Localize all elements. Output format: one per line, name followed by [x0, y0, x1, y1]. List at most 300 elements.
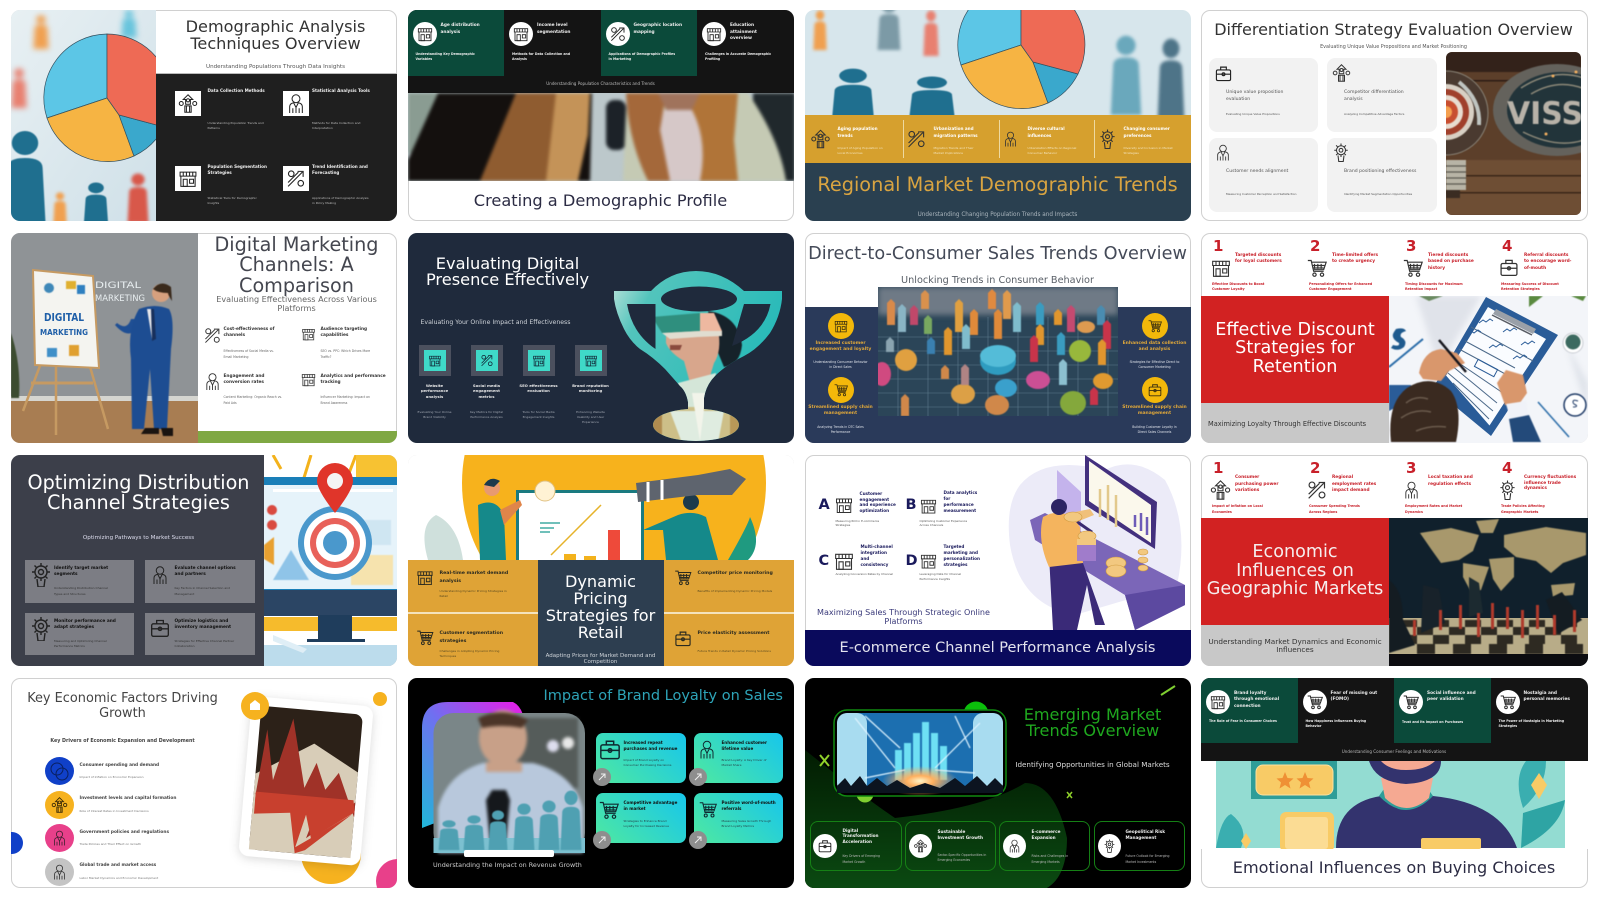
step 4: influence trade — [1524, 481, 1561, 486]
slide: Regional Market Demographic Trends — [804, 10, 1191, 220]
step 3: Tiered discounts — [1428, 252, 1468, 258]
icon: brand tile — [574, 344, 606, 376]
item: statistical tools: Methods for Data Collection and — [312, 121, 360, 125]
feature: supply chain right: Streamlined supply chain — [1122, 404, 1187, 410]
item A: A — [818, 497, 830, 513]
icon: store — [1206, 690, 1230, 714]
factor: consumer spending — [44, 756, 164, 786]
item: cost: Email Marketing — [224, 355, 248, 359]
icon: seo tile — [522, 344, 554, 376]
card: e-commerce — [998, 820, 1090, 870]
item: trend identification: Applications of Demographic Analysis — [312, 196, 369, 200]
item: trend identification: in Policy Making — [312, 201, 336, 205]
card: identify: Understanding Distribution Channel — [54, 586, 108, 590]
item: social influence — [1399, 690, 1489, 732]
card: identify: segments — [54, 572, 78, 577]
icon: money — [1332, 64, 1350, 82]
item: trend identification — [283, 164, 369, 205]
item D: personalization — [944, 556, 980, 561]
item: preferences: Diversity and Inclusion in Market — [1124, 146, 1173, 150]
feature: engagement: in Direct Sales — [829, 365, 852, 369]
item: trend identification: Forecasting — [312, 170, 339, 175]
item: audience: Traffic? — [320, 355, 331, 359]
card: lifetime value — [694, 732, 782, 782]
card: repeat purchases: Consumer Purchasing Decisions — [624, 763, 671, 767]
item: preferences: Strategies — [1124, 151, 1139, 155]
step 1: purchasing power — [1235, 482, 1278, 486]
item: segmentation: Statistical Tools for Demographic — [208, 196, 257, 200]
card: e-commerce: E-commerce — [1032, 828, 1060, 834]
slide: Effective Discount Strategies for Retention — [1201, 232, 1588, 443]
image: man drawing on easel: DIGITAL — [44, 312, 84, 324]
title: Retention — [1253, 356, 1337, 376]
icon: money — [1210, 480, 1231, 500]
icon: store — [920, 551, 936, 571]
card: digital transformation — [810, 820, 902, 870]
step 1: Impact of Inflation on Local — [1212, 504, 1263, 508]
item: social influence: peer validation — [1427, 697, 1464, 702]
card: monitor: Monitor performance and — [54, 619, 116, 624]
icon: person — [44, 824, 74, 852]
card: optimize: Optimize logistics and — [174, 619, 228, 624]
panel: dark header strip — [408, 10, 794, 93]
arrow badge 4 — [688, 830, 706, 848]
item: analytics: Analytics and performance — [320, 374, 386, 378]
metric: brand: Brand reputation — [572, 382, 609, 388]
title — [186, 17, 365, 53]
card: geopolitical risk: Geopolitical Risk — [1126, 828, 1165, 834]
item: segmentation: strategies — [440, 639, 466, 644]
step 1: 1 — [1213, 236, 1223, 254]
card: competitive advantage: Strategies to Enhance Brand — [624, 818, 667, 822]
icon: money — [174, 91, 200, 116]
step 3 — [1402, 459, 1492, 516]
item: preferences: Changing consumer — [1124, 126, 1170, 131]
item: cost: channels — [224, 333, 245, 338]
icon: gear — [1098, 834, 1121, 858]
icon: money — [44, 790, 74, 818]
panel: red title — [1201, 296, 1389, 402]
step 1: for loyal customers — [1235, 259, 1282, 264]
item: realtime — [414, 569, 534, 607]
item: nostalgia: personal memories — [1524, 697, 1570, 702]
title: Economic — [1252, 542, 1338, 562]
subtitle: Competition — [584, 659, 617, 665]
icon: store — [920, 496, 936, 516]
step 1 — [1209, 236, 1299, 294]
metric: website — [418, 345, 452, 419]
item B: performance — [944, 502, 974, 507]
item: data collection — [175, 88, 265, 130]
feature: supply chain left — [806, 376, 874, 436]
item: aging: Local Economies — [838, 151, 863, 155]
card: customer: Measuring Customer Perception and Satisfaction — [1226, 192, 1296, 196]
item: geographic: mapping — [634, 30, 655, 35]
icon: cart — [1402, 258, 1424, 278]
title: Strategies for — [546, 606, 655, 625]
title: Growth — [99, 706, 146, 720]
image: woman in VR headset inside trophy — [614, 271, 782, 441]
step 2: Customer Engagement — [1309, 287, 1351, 291]
icon: store tile — [418, 344, 450, 376]
card: word of mouth: Brand Loyalty Metrics — [722, 824, 754, 828]
step 3: Retention Impact — [1405, 287, 1437, 291]
card: competitive advantage: in market — [624, 806, 646, 811]
item: realtime: Retail — [440, 594, 448, 598]
icon: map — [606, 22, 630, 46]
metric: website: Evaluating Your Online — [418, 410, 451, 414]
item: statistical tools — [283, 88, 370, 130]
card: e-commerce: Emerging Markets — [1032, 860, 1060, 864]
factor: consumer spending: Impact of Inflation on Economic Expansion — [80, 775, 144, 779]
metric: brand: Enhancing Website — [576, 410, 605, 414]
panel: navy footer — [804, 163, 1192, 221]
card: sustainable investment: Sustainable — [938, 828, 965, 834]
step 4: Trade Policies Affecting — [1501, 504, 1545, 508]
card: sustainable investment: Emerging Economies — [938, 858, 970, 862]
card: word of mouth: Positive word-of-mouth — [722, 800, 776, 804]
item: education — [702, 22, 771, 61]
feature: data collection — [1120, 312, 1188, 372]
title: Geographic Markets — [1207, 579, 1383, 599]
card: lifetime value: Brand Loyalty: A Key Driver of — [722, 758, 766, 762]
item: age distribution: Variables — [416, 57, 432, 61]
footer text: Maximizing Loyalty Through Effective Discounts — [1208, 420, 1366, 428]
icon: cart badge — [828, 376, 854, 402]
step 3: 3 — [1406, 236, 1416, 254]
subtitle: Identifying Opportunities in Global Markets — [1015, 760, 1170, 768]
icon: money — [908, 834, 932, 858]
metric: seo: evaluation — [527, 388, 550, 393]
item: segmentation: Techniques — [440, 654, 456, 658]
title: E-commerce Channel Performance Analysis — [840, 640, 1155, 656]
item: cultural: Diverse cultural — [1028, 126, 1065, 131]
item D: D — [906, 553, 918, 569]
card: digital transformation: Key Drivers of Emerging — [842, 854, 880, 858]
icon: store — [1209, 258, 1233, 278]
icon: cart badge — [1142, 312, 1168, 338]
card: repeat purchases: purchases and revenue — [624, 746, 677, 751]
title: Channels: A — [239, 253, 354, 276]
panel: green column 1 — [408, 10, 504, 76]
item: brand loyalty — [1206, 690, 1296, 732]
title: Regional Market Demographic Trends — [817, 173, 1178, 196]
slide: E-commerce Channel Performance Analysis: Targeted — [944, 544, 964, 549]
icon: education — [702, 22, 726, 46]
step 3: Employment Rates and Market — [1405, 504, 1462, 508]
item: urbanization: Market Implications — [934, 151, 963, 155]
icon: bag — [672, 630, 694, 647]
step 4: Geographic Markets — [1501, 510, 1538, 514]
icon: store — [414, 569, 436, 586]
step 1: Economies — [1212, 510, 1232, 514]
image: man drawing on easel: DIGITAL — [94, 280, 140, 290]
feature: engagement: engagement and loyalty — [810, 347, 871, 352]
item: brand loyalty: The Role of Fear in Consumer Choices — [1209, 719, 1277, 723]
subtitle: Evaluating Your Online Impact and Effectiveness — [420, 319, 570, 326]
item C — [818, 547, 902, 581]
slide: Impact of Brand Loyalty on Sales — [408, 678, 794, 888]
divider left — [408, 612, 538, 614]
card: lifetime value: Market Share — [722, 763, 741, 767]
item: geographic: Applications of Demographic Profiles — [608, 52, 675, 56]
item: brand loyalty: connection — [1234, 704, 1261, 709]
card: digital transformation: Digital — [842, 828, 858, 832]
panel: navy band — [804, 306, 1192, 444]
card: monitor: Performance Metrics — [54, 644, 85, 648]
slide: Creating a Demographic Profile — [408, 10, 794, 220]
step 2: Personalizing Offers for Enhanced — [1309, 282, 1372, 286]
card: geopolitical risk: Market Investments — [1126, 860, 1156, 864]
factor: global trade: Global trade and market access — [80, 862, 156, 868]
item A: optimization — [860, 508, 889, 513]
card: word of mouth — [694, 792, 782, 842]
panel: green column 3 — [600, 10, 697, 76]
item: trend identification: Trend Identification and — [312, 164, 368, 169]
icon: income — [509, 22, 533, 46]
item C: consistency — [860, 562, 888, 567]
step 1: Effective Discounts to Boost — [1212, 282, 1264, 286]
card: unique value: Unique value proposition — [1226, 90, 1283, 94]
card: optimize: Strategies for Effective Channel Partner — [174, 638, 234, 642]
icon: store — [832, 496, 854, 514]
icon: store — [832, 551, 854, 571]
item: realtime: analysis — [440, 579, 461, 584]
step 4: of-mouth — [1524, 266, 1546, 270]
item: social influence: Trust and Its Impact on Purchases — [1402, 720, 1463, 724]
card: competitive advantage — [596, 792, 686, 842]
panel: gold right — [664, 560, 794, 666]
metric: social: Social media — [473, 382, 500, 388]
item: preferences: preferences — [1124, 132, 1151, 138]
metric: brand — [566, 344, 614, 424]
step 3: based on purchase — [1428, 259, 1474, 264]
icon: briefcase — [813, 834, 837, 858]
step 2: Regional — [1332, 475, 1353, 480]
metric: website: performance — [421, 388, 448, 393]
subtitle — [817, 608, 990, 627]
icon: person — [1403, 480, 1420, 500]
item A: Measuring ROI in E-commerce — [836, 518, 879, 522]
slide: Key Economic Factors Driving Growth — [10, 678, 397, 888]
card: repeat purchases: Increased repeat — [624, 740, 663, 744]
arrow badge 3 — [592, 830, 610, 848]
item: engagement: conversion rates — [224, 380, 264, 385]
card: evaluate: Evaluate channel options — [174, 566, 236, 571]
card: identify — [24, 560, 134, 603]
step 2: impact demand — [1332, 488, 1370, 493]
item: analytics: Influencer Marketing: Impact on — [320, 394, 370, 398]
item: audience: SEO vs. PPC: Which Drives More — [320, 349, 370, 353]
item: cultural: Urbanization Effects on Regional — [1028, 146, 1076, 150]
item D: strategies — [944, 562, 968, 567]
card: competitor — [1327, 58, 1437, 132]
item C: integration — [860, 550, 887, 555]
feature: data collection: Consumer Marketing — [1138, 365, 1171, 369]
item: geographic — [606, 22, 682, 61]
step 1: variations — [1235, 488, 1259, 493]
icon: cart — [672, 569, 694, 586]
item: cultural: influences — [1028, 132, 1051, 138]
icon: age — [412, 22, 436, 46]
metric: brand: Experience — [582, 420, 599, 424]
item: education: Education — [730, 23, 754, 28]
title: Pricing — [573, 589, 628, 608]
image: world map and chess board — [1389, 518, 1588, 666]
card: geopolitical risk — [1094, 820, 1184, 870]
title: Evaluating Digital — [436, 254, 579, 272]
item: urbanization: migration patterns — [934, 132, 978, 138]
feature: engagement: Understanding Consumer Behavior — [813, 360, 868, 364]
image: man drawing on easel: MARKETING — [94, 294, 144, 304]
image: tilted photo with red chart and decorative circles — [10, 678, 398, 888]
feature: supply chain right: Building Customer Loyalty in — [1132, 424, 1177, 428]
item: age distribution: analysis — [440, 30, 460, 35]
factor: investment — [44, 790, 164, 820]
card: repeat purchases: Impact of Brand Loyalty on — [624, 758, 664, 762]
item: cultural: Consumer Behavior — [1028, 151, 1057, 155]
step 4: 4 — [1502, 459, 1512, 477]
panel: gray footer — [1201, 625, 1389, 666]
factor: investment: Role of Interest Rates in Investment Decisions — [80, 809, 149, 813]
panel: navy footer — [804, 630, 1192, 666]
card: evaluate: and partners — [174, 572, 206, 577]
item: elasticity: Price elasticity assessment — [698, 631, 770, 636]
item: income: Income level — [537, 23, 568, 28]
metric: social: engagement — [473, 388, 500, 393]
item: cultural — [1005, 126, 1076, 155]
title: Retail — [578, 623, 623, 642]
card: competitive advantage: Loyalty for Increased Revenue — [624, 824, 669, 828]
factor: government — [44, 824, 164, 852]
item: FOMO: Fear of missing out — [1330, 690, 1377, 696]
icon: person — [1005, 132, 1016, 146]
icon: network — [1498, 258, 1520, 276]
card: e-commerce: Expansion — [1032, 835, 1056, 840]
slide: Optimizing Distribution Channel Strategies — [10, 455, 397, 666]
feature: data collection: Enhanced data collection — [1123, 340, 1186, 346]
panel: navy center — [538, 560, 664, 666]
icon: percent arrow — [1306, 480, 1328, 500]
accent bar — [198, 430, 398, 444]
item D: marketing and — [944, 550, 978, 555]
item: competitor — [672, 569, 792, 599]
item: segmentation — [175, 164, 267, 205]
slide: Direct-to-Consumer Sales Trends Overview — [804, 232, 1191, 443]
image: man drawing on easel — [11, 233, 198, 443]
title — [546, 573, 655, 641]
feature: data collection: Strategies for Effective Direct to — [1130, 360, 1179, 364]
card: optimize: inventory management — [174, 625, 231, 630]
icon: cart — [1302, 690, 1326, 714]
item: segmentation — [414, 629, 534, 664]
subtitle — [216, 294, 377, 313]
item: nostalgia: Strategies — [1498, 724, 1517, 728]
card: monitor: adapt strategies — [54, 625, 94, 630]
icon: money — [811, 130, 830, 148]
image: light bulb and vision target on wood — [1446, 52, 1581, 215]
factor: global trade — [44, 858, 164, 886]
caption: Understanding Population Characteristics and Trends — [546, 81, 655, 86]
icon: person — [206, 373, 219, 390]
step 4 — [1498, 459, 1586, 516]
item: aging: Aging population — [838, 126, 878, 131]
factor: government: Government policies and regulations — [80, 830, 169, 834]
title: Emotional Influences on Buying Choices — [1233, 858, 1555, 876]
card: identify: Identify target market — [54, 566, 108, 571]
subtitle: Understanding Changing Population Trends and Impacts — [918, 212, 1077, 218]
item B: Optimizing Customer Experience — [920, 518, 967, 522]
item: audience: capabilities — [320, 333, 348, 338]
item: FOMO: How Happiness Influences Buying — [1306, 719, 1366, 723]
step 3: Timing Discounts for Maximum — [1405, 282, 1463, 286]
item: education: overview — [730, 36, 752, 41]
metric: brand: Usability and User — [577, 415, 604, 419]
title: Effective Discount — [1215, 320, 1375, 340]
card: word of mouth: Measuring Sales Growth Through — [722, 818, 771, 822]
icon: bag badge — [1142, 376, 1168, 402]
title: Creating a Demographic Profile — [474, 191, 727, 210]
item: engagement: Engagement and — [224, 374, 264, 378]
metric: website: Brand Visibility — [423, 415, 446, 419]
item: segmentation: Insights — [208, 201, 219, 205]
item: statistical tools: Statistical Analysis Tools — [312, 88, 370, 93]
title: Presence Effectively — [426, 270, 589, 289]
title — [426, 254, 589, 289]
item: segmentation: Customer segmentation — [440, 631, 503, 636]
feature: supply chain right: Direct Sales Channels — [1138, 430, 1171, 434]
icon: cost — [205, 328, 220, 343]
item: realtime: Understanding Dynamic Pricing Strategies in — [440, 589, 507, 593]
panel: gold band — [804, 115, 1192, 163]
card: competitor: Analyzing Competitive Advantage Factors — [1344, 112, 1404, 116]
step 4: Referral discounts — [1524, 252, 1568, 258]
item: competitor: Competitor price monitoring — [698, 571, 773, 576]
item: analytics — [302, 374, 386, 404]
item C: C — [818, 553, 829, 569]
icon: briefcase — [1216, 66, 1232, 82]
metric: social — [470, 345, 503, 419]
arrow badge 1 — [592, 768, 610, 786]
footer text: Influences — [1276, 645, 1314, 654]
item A — [818, 491, 902, 533]
title: Channel Strategies — [47, 491, 230, 514]
icon: coins — [44, 756, 74, 784]
image: two women with long hair — [408, 93, 794, 181]
card: brand: Identifying Market Segmentation Opportunities — [1344, 192, 1412, 196]
icon: percent arrow — [908, 130, 925, 148]
card: lifetime value: Enhanced customer — [722, 740, 767, 744]
item: preferences — [1100, 126, 1173, 155]
image: data explosion with crowd — [832, 700, 1008, 806]
card: monitor — [24, 613, 134, 655]
step 3: Local taxation and — [1428, 475, 1473, 480]
item B: B — [906, 497, 917, 513]
background: green blob — [804, 678, 1192, 888]
icon: cart — [1399, 690, 1423, 714]
icon: percent arrow — [282, 166, 308, 191]
item C: Analyzing Conversion Rates by Channel — [836, 572, 893, 576]
step 1: Targeted discounts — [1235, 252, 1281, 258]
title: Comparison — [239, 274, 354, 296]
card: competitive advantage: Competitive advantage — [624, 800, 677, 804]
icon: person — [282, 91, 308, 116]
item: age distribution — [413, 22, 480, 61]
metric: social: Performance Analysis — [470, 415, 503, 419]
item: age distribution: Understanding Key Demographic — [416, 52, 475, 56]
item: nostalgia — [1496, 690, 1586, 732]
card: monitor: Measuring and Optimizing Channel — [54, 638, 107, 642]
